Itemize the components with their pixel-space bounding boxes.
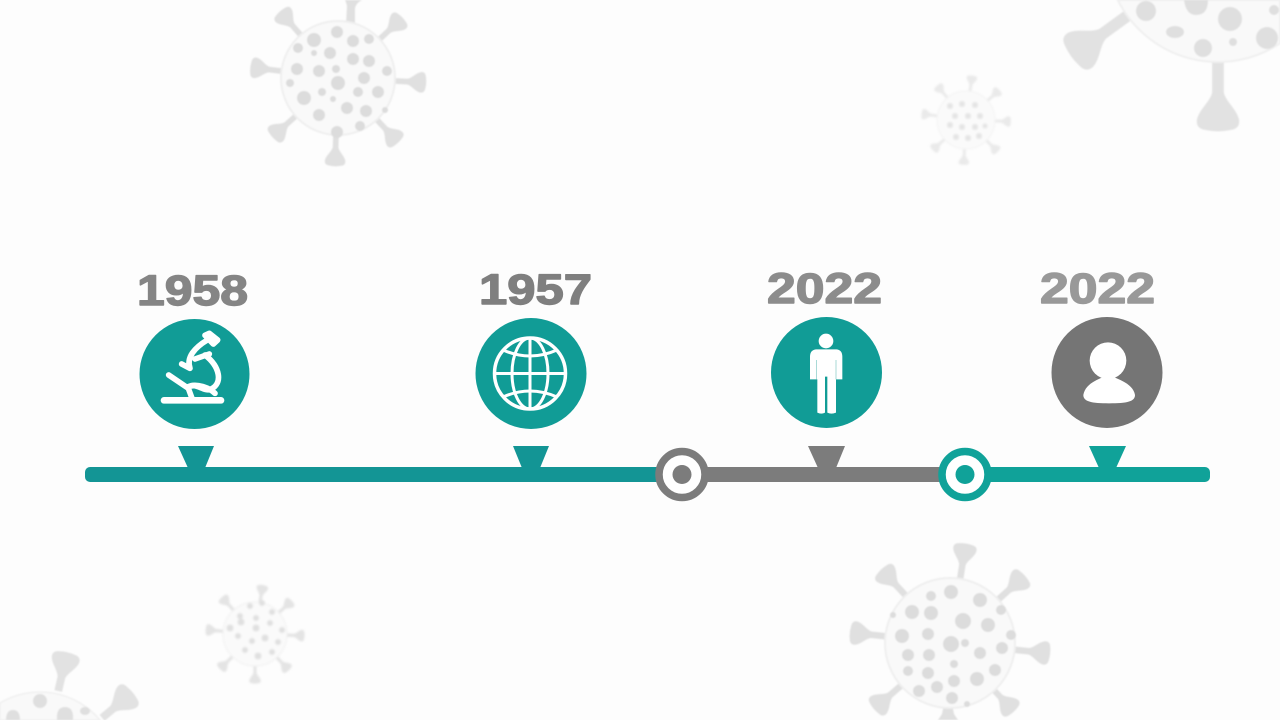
year 1957: 1957 (479, 266, 592, 314)
year 2022: 2022 (767, 265, 882, 313)
pointer (513, 446, 549, 468)
icon: microscope (140, 319, 250, 429)
milestone: 1957 globe (476, 266, 592, 468)
year 1958: 1958 (137, 267, 248, 315)
pointer (1089, 446, 1126, 468)
timeline bar (85, 467, 1210, 482)
icon: standing person (771, 317, 882, 428)
virus: top right corner (1059, 0, 1280, 131)
virus: bottom left corner (0, 649, 142, 720)
milestone: 2022 user (1040, 265, 1162, 468)
year 2022: 2022 (1040, 265, 1155, 313)
ring marker: teal (942, 452, 988, 498)
virus: bottom right of centre (849, 542, 1051, 720)
virus: small top right (921, 75, 1011, 165)
milestone: 1958 microscope (137, 267, 250, 468)
ring marker: grey (659, 452, 705, 498)
virus: small bottom left (205, 584, 305, 684)
pointer (808, 446, 845, 468)
icon: user silhouette (1052, 317, 1162, 428)
virus: top centre-left (249, 0, 427, 167)
pointer (178, 446, 214, 468)
icon: globe (476, 318, 586, 429)
milestone: 2022 person (767, 265, 882, 468)
